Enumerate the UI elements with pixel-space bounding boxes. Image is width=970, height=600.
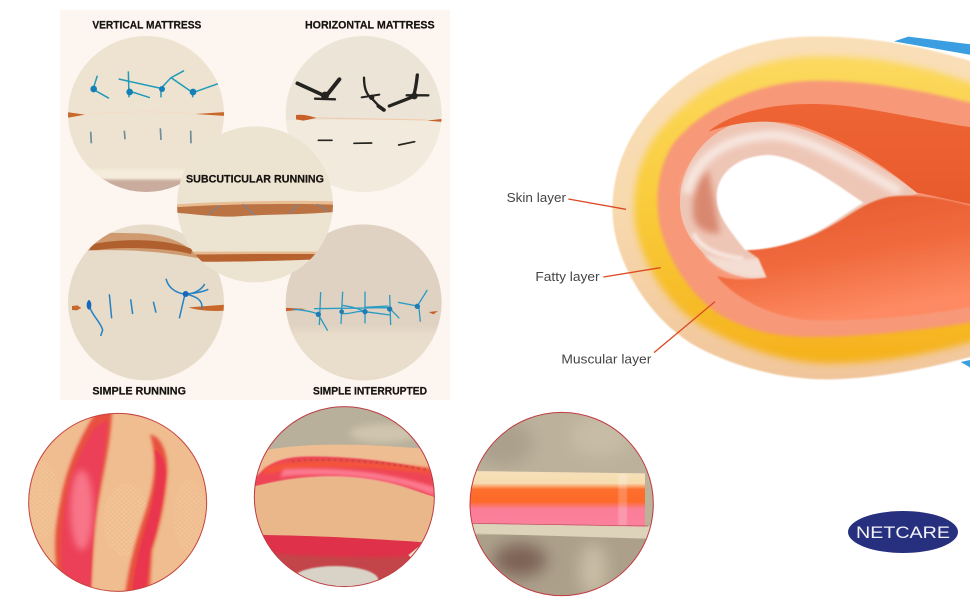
inner folded membrane [680,121,918,279]
circle: horizontal mattress [283,35,443,195]
callout: muscular layer [561,302,715,366]
detail circle: incisions in skin [20,410,207,597]
detail circles: skin surface and edge [20,407,438,600]
circle: vertical mattress [67,35,227,195]
foam layers cross-section photo [507,36,970,379]
caption: vertical mattress: VERTICAL MATTRESS [92,20,201,32]
caption: simple running: SIMPLE RUNNING [92,385,186,397]
skin layer [613,36,970,379]
blue backing [894,37,970,367]
fatty layer [634,56,970,363]
logo: NETCARE [848,511,958,553]
circle: simple interrupted [283,223,443,383]
logo: NETCARE: NETCARE [856,524,950,542]
detail circle: layered edge [250,407,438,600]
caption: horizontal mattress: HORIZONTAL MATTRESS [305,20,435,32]
callout: skin layer [507,190,626,209]
opening in the fold [717,155,863,250]
lower inner muscle surface [717,196,970,320]
circle: subcuticular running [175,126,335,283]
muscular layer [658,81,970,337]
caption: subcuticular running: SUBCUTICULAR RUNNING [186,174,324,186]
callout: fatty layer [535,268,661,284]
upper inner muscle surface [708,104,970,208]
circle: simple running [67,223,227,383]
callout: skin layer: Skin layer [507,190,567,205]
callout: muscular layer: Muscular layer [561,351,652,366]
callout: fatty layer: Fatty layer [535,269,600,284]
panel: suture types [60,10,450,400]
caption: simple interrupted: SIMPLE INTERRUPTED [313,385,427,397]
detail circle: foam side view [467,412,657,600]
